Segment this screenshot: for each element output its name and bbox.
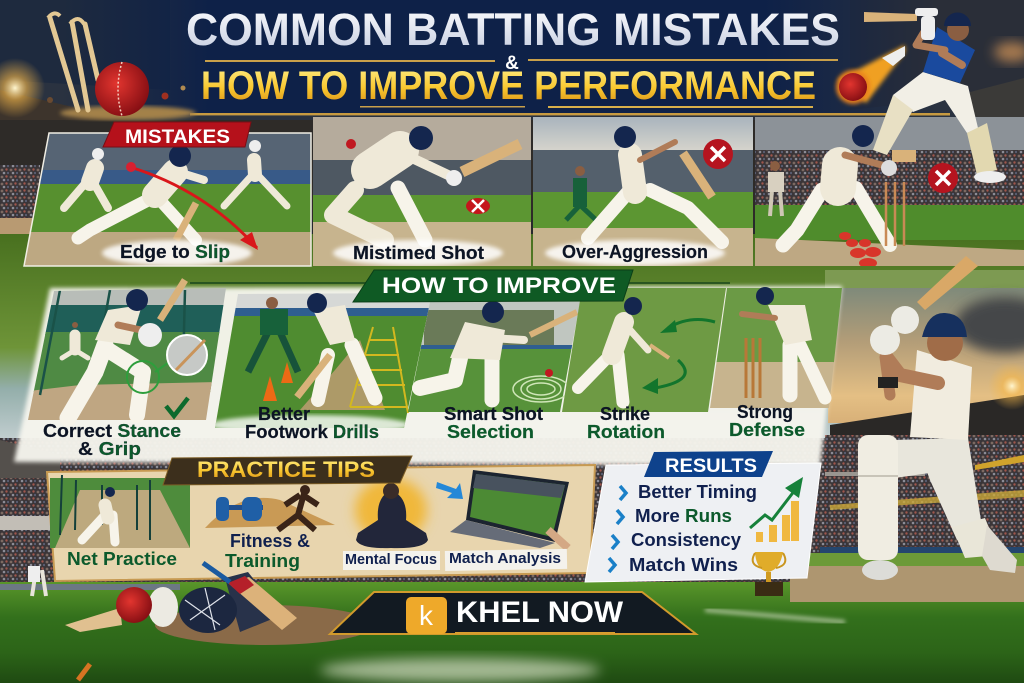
icon: k logo: k xyxy=(419,600,434,631)
label: Correct Stance xyxy=(43,421,181,441)
panel: strong defense: Defense xyxy=(729,420,805,440)
panel: mistakes row xyxy=(20,117,1024,268)
badge: results xyxy=(644,451,773,477)
title line 1: COMMON BATTING MISTAKES xyxy=(186,4,840,55)
panel: match analysis xyxy=(436,470,569,571)
arms xyxy=(887,358,938,383)
figure: batsman xyxy=(78,145,204,240)
panel: mistimed shot xyxy=(313,117,531,266)
icon: cross xyxy=(928,163,958,193)
icon: ball xyxy=(545,369,553,377)
icon: target rings xyxy=(513,376,569,402)
icon: stumps xyxy=(746,338,760,398)
title banner xyxy=(60,0,950,116)
badge: results: RESULTS xyxy=(665,456,757,477)
label: Smart Shot xyxy=(444,404,543,424)
icon: cross xyxy=(703,139,733,169)
label: Fitness & xyxy=(230,531,310,551)
chart: rising bars and arrow xyxy=(750,477,803,542)
label: Better xyxy=(258,404,310,424)
panel: mental focus xyxy=(343,478,440,570)
label: Strike xyxy=(600,404,650,424)
label: Over-Aggression xyxy=(562,242,708,262)
panel: edge to slip xyxy=(20,133,315,266)
back leg xyxy=(915,438,982,540)
ampersand: & xyxy=(505,53,519,74)
panel: correct stance and grip xyxy=(20,280,230,459)
panel: fitness and training xyxy=(205,485,335,571)
label: Net Practice xyxy=(67,549,177,569)
icon: green check xyxy=(166,398,188,416)
label: Mistimed Shot xyxy=(353,243,484,263)
figure: batsman xyxy=(297,293,375,400)
heading: practice tips xyxy=(163,456,412,485)
figure: batsman xyxy=(420,301,577,400)
icon: stumps and red ball xyxy=(47,13,196,120)
arrow: ball path xyxy=(126,162,258,250)
front pad xyxy=(858,435,898,560)
panel: better footwork drills: Footwork Drills xyxy=(245,422,379,442)
figure: umpire xyxy=(768,161,784,216)
list: Better Timing xyxy=(638,482,757,502)
panel: better footwork drills xyxy=(210,293,435,442)
heading: mistakes xyxy=(103,122,251,148)
badge: khel now logo xyxy=(330,592,696,634)
panel: bowled xyxy=(755,117,1024,268)
list: More Runs xyxy=(635,506,732,526)
list xyxy=(609,482,757,575)
label: Strong xyxy=(737,402,793,422)
figure: fielders xyxy=(64,140,287,208)
icon: agility ladder xyxy=(350,327,408,413)
icon: cross on pitch xyxy=(466,198,490,214)
gloves xyxy=(870,325,900,355)
panel: practice tips xyxy=(47,465,595,581)
icon: cones xyxy=(263,362,293,401)
decorative ember xyxy=(78,664,90,680)
figure: batsman xyxy=(68,280,185,418)
torso xyxy=(910,350,972,440)
figure: batsman xyxy=(578,297,669,402)
figure: fielder xyxy=(566,166,596,220)
figure: batsman xyxy=(742,287,825,398)
list: Match Wins xyxy=(629,555,738,575)
label: Match Analysis xyxy=(449,550,561,567)
panel: correct stance and grip: & Grip xyxy=(78,439,141,459)
panel: improve backdrop xyxy=(14,286,842,466)
arrow: upper green arrow xyxy=(660,320,715,333)
panel: smart shot selection xyxy=(408,301,583,442)
panel: fitness and training: Training xyxy=(225,551,300,571)
icon: cricket kit xyxy=(65,563,297,633)
arrow: blue xyxy=(436,482,463,499)
figure: large batsman right xyxy=(858,256,1017,580)
heading: how to improve xyxy=(190,270,730,302)
right stadium xyxy=(825,270,1024,292)
head xyxy=(927,325,963,361)
list: Consistency xyxy=(631,530,741,550)
icon: inset circle xyxy=(127,335,207,393)
heading: practice tips: PRACTICE TIPS xyxy=(197,457,375,482)
figure: net fielder xyxy=(62,322,88,358)
top corners xyxy=(850,0,1024,110)
figure: top right batsman xyxy=(864,8,1006,183)
figure: batsman xyxy=(588,126,722,242)
heading: mistakes: MISTAKES xyxy=(125,127,230,148)
panel: results xyxy=(585,451,821,582)
figure: batsman xyxy=(333,126,520,240)
panel: smart shot selection: Selection xyxy=(447,422,534,442)
panel: net practice xyxy=(50,475,190,569)
label: Mental Focus xyxy=(345,551,437,568)
hip xyxy=(892,438,968,478)
bat xyxy=(917,256,978,310)
arrow: lower green arrow xyxy=(642,360,685,394)
panel: over-aggression xyxy=(533,117,753,266)
label: Edge to Slip xyxy=(120,242,230,262)
icon: ball xyxy=(346,139,356,149)
icon: fireball xyxy=(836,45,905,104)
figure: batsman xyxy=(783,125,916,245)
badge: khel now logo: KHEL NOW xyxy=(456,596,624,629)
figure: coach xyxy=(248,297,298,372)
panel: strike rotation xyxy=(560,288,730,442)
icon: red footmarks xyxy=(839,232,881,268)
panel: strike rotation: Rotation xyxy=(587,422,665,442)
heading: how to improve: HOW TO IMPROVE xyxy=(382,273,616,298)
grass wear xyxy=(320,658,600,682)
icon: k logo xyxy=(406,597,447,634)
icon: stumps xyxy=(886,182,904,246)
panel: strong defense xyxy=(705,287,845,440)
icon: trophy xyxy=(753,552,785,596)
title line 2: HOW TO IMPROVE PERFORMANCE xyxy=(201,64,816,108)
